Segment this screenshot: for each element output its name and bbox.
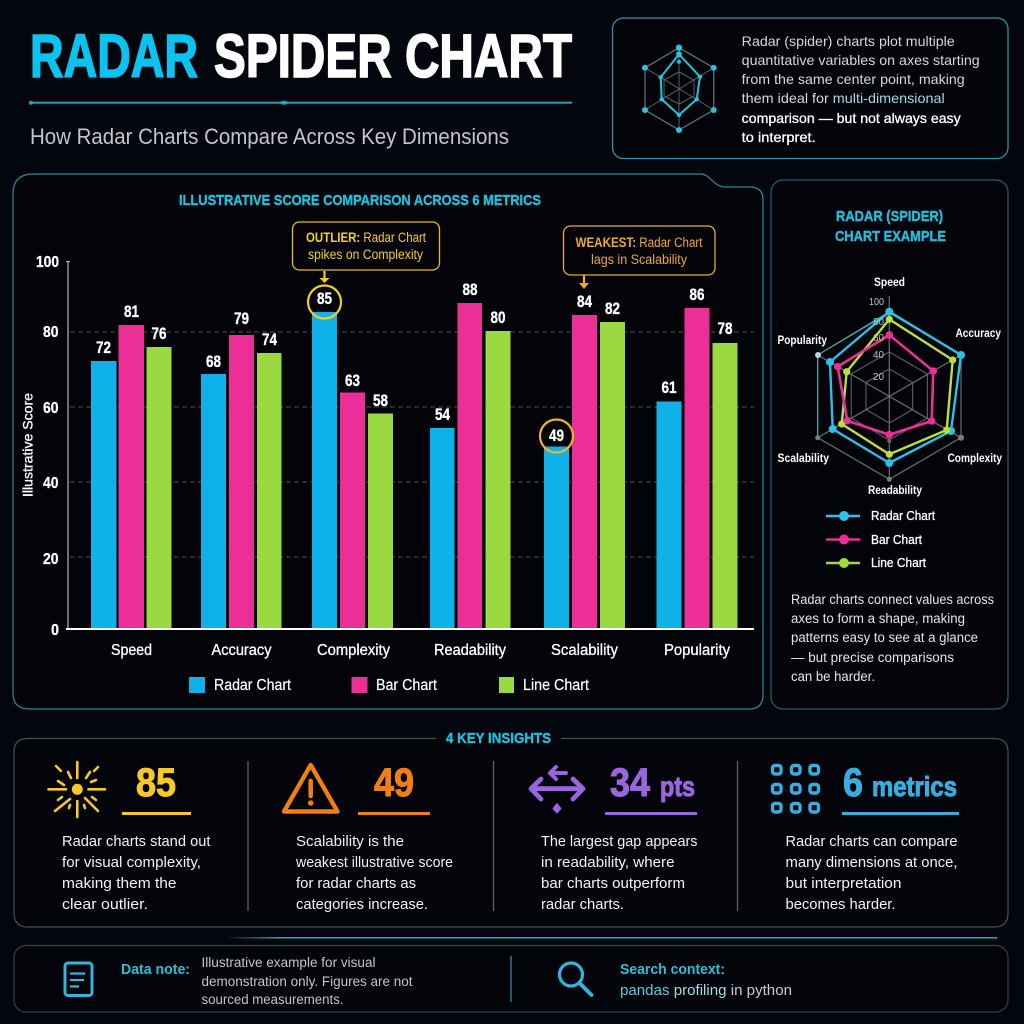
category labels bbox=[111, 642, 730, 659]
radar heading: CHART EXAMPLE bbox=[835, 229, 946, 245]
insight text: in readability, where bbox=[541, 855, 674, 871]
stat: 85: 85 bbox=[136, 761, 176, 805]
bars: Popularity: 86 bbox=[690, 286, 704, 304]
bars: Speed: 72 bbox=[96, 339, 111, 357]
chart legend: Radar Chart bbox=[214, 677, 292, 694]
chart legend: Line Chart bbox=[523, 677, 590, 694]
y axis labels: 40 bbox=[43, 475, 59, 492]
callout: outlier bbox=[292, 222, 440, 283]
radar axis labels: Scalability bbox=[778, 451, 829, 465]
radar description: Radar charts connect values across bbox=[791, 592, 994, 607]
radar axis labels: Popularity bbox=[778, 333, 827, 347]
panel: bar chart bbox=[13, 174, 763, 709]
bars: Speed bbox=[91, 303, 172, 628]
title bbox=[30, 22, 572, 90]
bars: Speed: 76 bbox=[152, 325, 166, 343]
insight text: weakest illustrative score bbox=[295, 855, 453, 871]
insight: metrics bbox=[772, 761, 959, 913]
highlight circle: 49 bbox=[540, 420, 573, 452]
bars: Scalability bbox=[544, 293, 625, 628]
insight text: The largest gap appears bbox=[541, 834, 698, 850]
title: RADAR bbox=[30, 22, 198, 90]
insight text: but interpretation bbox=[786, 876, 902, 892]
radar description: axes to form a shape, making bbox=[791, 611, 965, 626]
intro text: comparison — but not always easy bbox=[742, 110, 961, 126]
insight text bbox=[62, 834, 210, 913]
y axis labels: 0 bbox=[51, 622, 59, 639]
radar axis labels: Complexity bbox=[948, 451, 1002, 465]
radar chart: 60 bbox=[873, 332, 884, 344]
bars: Readability: 54 bbox=[435, 406, 451, 424]
radar chart bbox=[815, 296, 965, 482]
bars: Scalability: 49 bbox=[549, 427, 564, 445]
category labels: Complexity bbox=[317, 642, 390, 659]
bars: Complexity: 85 bbox=[317, 290, 332, 308]
icon: mini radar bbox=[642, 44, 717, 133]
icon: arrows bbox=[531, 767, 583, 813]
category labels: Accuracy bbox=[212, 642, 272, 659]
insight text: Scalability is the bbox=[296, 834, 404, 850]
radar chart: 40 bbox=[873, 349, 884, 361]
insight text: bar charts outperform bbox=[541, 876, 685, 892]
y axis labels: 60 bbox=[43, 400, 59, 417]
bars: Popularity: 78 bbox=[718, 320, 732, 338]
subtitle: How Radar Charts Compare Across Key Dimensions bbox=[30, 124, 509, 149]
icon: warning bbox=[284, 765, 338, 812]
chart legend: Bar Chart bbox=[376, 677, 438, 694]
insight text: for radar charts as bbox=[296, 876, 416, 892]
highlight circle: 85 bbox=[308, 286, 341, 318]
bars: Complexity: 63 bbox=[345, 372, 360, 390]
intro text: Radar (spider) charts plot multiple bbox=[742, 33, 955, 49]
intro text: to interpret. bbox=[742, 129, 816, 145]
callout: outlier: OUTLIER: Radar Chart bbox=[306, 230, 426, 245]
insight text: radar charts. bbox=[541, 897, 624, 913]
search context: Search context: bbox=[620, 962, 725, 978]
y axis labels: 100 bbox=[36, 254, 59, 271]
bars: Readability: 80 bbox=[490, 309, 506, 327]
callout: outlier: spikes on Complexity bbox=[308, 247, 423, 262]
stat: 34 pts: pts bbox=[660, 771, 695, 802]
bars: Speed: 81 bbox=[124, 303, 139, 321]
callout: weakest: lags in Scalability bbox=[591, 252, 687, 267]
search context bbox=[620, 962, 792, 999]
callout: weakest: WEAKEST: Radar Chart bbox=[576, 235, 703, 250]
radar legend: Bar Chart bbox=[871, 532, 922, 547]
bars: Scalability: 84 bbox=[577, 293, 593, 311]
stat: 49: 49 bbox=[374, 761, 414, 805]
intro text bbox=[742, 33, 980, 145]
callout: weakest bbox=[564, 226, 715, 289]
intro text: them ideal for multi-dimensional bbox=[742, 90, 945, 106]
bars: Complexity: 58 bbox=[373, 392, 388, 410]
title underline bbox=[29, 101, 572, 105]
bars: Accuracy: 74 bbox=[262, 331, 278, 349]
bars: Accuracy bbox=[201, 310, 282, 628]
data note: Illustrative example for visual bbox=[202, 955, 376, 970]
y axis labels: 20 bbox=[43, 551, 59, 568]
bars: Popularity bbox=[656, 286, 738, 628]
intro text: quantitative variables on axes starting bbox=[742, 52, 980, 68]
insight text bbox=[295, 834, 453, 913]
y axis labels bbox=[36, 254, 59, 639]
axes bbox=[66, 261, 70, 629]
data note: sourced measurements. bbox=[202, 992, 344, 1007]
radar description: patterns easy to see at a glance bbox=[791, 630, 978, 645]
radar axis labels: Readability bbox=[868, 483, 922, 497]
category labels: Popularity bbox=[664, 642, 730, 659]
radar legend: Radar Chart bbox=[871, 508, 935, 523]
bars: Readability: 88 bbox=[462, 281, 478, 299]
title: SPIDER CHART bbox=[214, 22, 572, 90]
insight: largest gap bbox=[531, 761, 698, 913]
y axis labels: 80 bbox=[43, 324, 59, 341]
chart legend bbox=[189, 677, 590, 694]
bars: Readability bbox=[430, 281, 510, 628]
radar axis labels: Accuracy bbox=[956, 326, 1001, 340]
icon: document bbox=[65, 963, 92, 996]
insight: outlier bbox=[48, 761, 210, 913]
radar chart: 80 bbox=[873, 316, 884, 328]
search context: pandas profiling in python bbox=[620, 983, 792, 999]
insight text: many dimensions at once, bbox=[786, 855, 958, 871]
radar description: can be harder. bbox=[791, 669, 875, 684]
category labels: Speed bbox=[111, 642, 152, 659]
insight text bbox=[786, 834, 958, 913]
insight text: clear outlier. bbox=[62, 897, 148, 913]
insight text: making them the bbox=[62, 876, 176, 892]
intro text: from the same center point, making bbox=[742, 71, 965, 87]
data note bbox=[121, 955, 413, 1007]
icon: burst bbox=[48, 762, 105, 817]
panel: key insights bbox=[14, 730, 1008, 927]
bars: Complexity bbox=[312, 290, 393, 628]
insight text: Radar charts stand out bbox=[62, 834, 210, 850]
radar chart: 100 bbox=[869, 296, 884, 308]
radar heading: RADAR (SPIDER) bbox=[836, 209, 943, 225]
icon: search bbox=[560, 963, 592, 995]
stat: 6 metrics: 6 bbox=[843, 761, 863, 805]
insight text: becomes harder. bbox=[786, 897, 896, 913]
panel: intro bbox=[612, 18, 1008, 158]
chart heading: ILLUSTRATIVE SCORE COMPARISON ACROSS 6 METRICS bbox=[179, 192, 541, 209]
category labels: Scalability bbox=[551, 642, 618, 659]
stat: 6 metrics bbox=[843, 761, 957, 805]
insight text: for visual complexity, bbox=[62, 855, 201, 871]
radar axis labels: Speed bbox=[874, 275, 905, 289]
bars: Popularity: 61 bbox=[662, 379, 676, 397]
radar description: — but precise comparisons bbox=[791, 650, 954, 665]
data note: Data note: bbox=[121, 962, 190, 978]
bars: Scalability: 82 bbox=[605, 300, 620, 318]
stat: 34 pts: 34 bbox=[610, 761, 651, 805]
insight: weakest bbox=[284, 761, 453, 913]
panel: radar example bbox=[771, 180, 1008, 709]
insights heading: 4 KEY INSIGHTS bbox=[446, 730, 551, 747]
radar axis labels bbox=[778, 275, 1002, 497]
insight text: Radar charts can compare bbox=[786, 834, 958, 850]
category labels: Readability bbox=[434, 642, 506, 659]
insight text: categories increase. bbox=[296, 897, 428, 913]
radar heading bbox=[835, 209, 946, 245]
radar legend bbox=[826, 508, 935, 570]
y axis title: Illustrative Score bbox=[20, 393, 36, 497]
stat: 34 pts bbox=[610, 761, 695, 805]
data note: demonstration only. Figures are not bbox=[202, 974, 413, 989]
panel: footer notes bbox=[14, 946, 1008, 1012]
icon: grid bbox=[772, 766, 818, 812]
radar description bbox=[791, 592, 994, 684]
radar legend: Line Chart bbox=[871, 555, 926, 570]
stat: 6 metrics: metrics bbox=[872, 771, 957, 802]
bars: Accuracy: 68 bbox=[206, 353, 221, 371]
bars: Accuracy: 79 bbox=[234, 310, 249, 328]
radar chart: 20 bbox=[873, 371, 884, 383]
insight text bbox=[541, 834, 698, 913]
